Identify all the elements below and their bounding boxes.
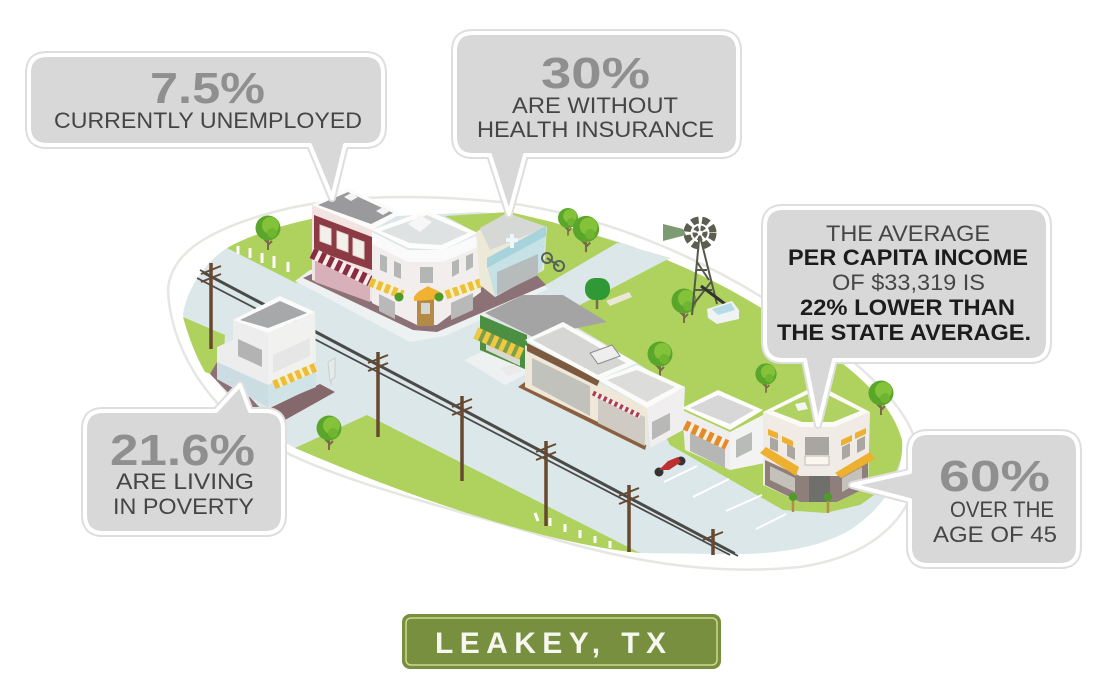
label: OVER THE bbox=[950, 497, 1054, 522]
cross bbox=[506, 234, 518, 248]
tree bbox=[755, 363, 777, 393]
tree bbox=[672, 288, 696, 323]
label: IN POVERTY bbox=[113, 494, 254, 519]
building: corner green-roof bbox=[760, 390, 875, 513]
tree bbox=[648, 342, 672, 376]
label bbox=[933, 497, 1057, 547]
red wall bbox=[312, 205, 373, 302]
callout: age bbox=[852, 433, 1078, 565]
cafe table bbox=[500, 364, 522, 376]
callout: per capita income bbox=[765, 208, 1048, 425]
bubble outline bbox=[85, 385, 283, 533]
text: OF $33,319 IS bbox=[832, 270, 985, 295]
tree bbox=[558, 208, 578, 236]
walls bbox=[763, 412, 870, 502]
bubble bbox=[765, 208, 1048, 425]
callout: unemployed bbox=[29, 55, 383, 198]
awning bbox=[685, 425, 727, 445]
door bbox=[809, 476, 830, 502]
trees bbox=[256, 208, 894, 450]
pink awning bbox=[593, 393, 640, 416]
bubble outline bbox=[765, 208, 1048, 425]
bubble outline bbox=[852, 433, 1078, 565]
grass: behind shops bbox=[445, 212, 620, 300]
red awning bbox=[312, 253, 370, 281]
bubble outline bbox=[29, 55, 383, 198]
road surface bbox=[183, 212, 902, 554]
cross arms bbox=[201, 266, 723, 540]
door pediment bbox=[414, 286, 443, 301]
awning bbox=[476, 333, 522, 354]
building: green shop bbox=[464, 295, 607, 385]
building: red and white corner block bbox=[295, 188, 548, 342]
label bbox=[113, 469, 254, 519]
side road strip bbox=[537, 243, 670, 303]
text: THE STATE AVERAGE. bbox=[777, 320, 1031, 345]
label: ARE LIVING bbox=[116, 469, 254, 494]
end wall bbox=[647, 387, 685, 448]
wires bbox=[200, 270, 738, 556]
pole bbox=[376, 352, 380, 437]
potted plants bbox=[394, 292, 444, 302]
tree bbox=[316, 416, 342, 450]
windmill bbox=[663, 220, 739, 324]
sign post bbox=[328, 358, 335, 385]
text: THE AVERAGE bbox=[826, 221, 990, 246]
value: 30% bbox=[541, 49, 650, 98]
yellow awning right bbox=[446, 282, 483, 295]
rooftop vents bbox=[590, 345, 620, 364]
value: 21.6% bbox=[110, 426, 255, 475]
tree bbox=[868, 380, 894, 415]
roof vents bbox=[344, 193, 390, 215]
bench bbox=[606, 292, 632, 306]
callout: health insurance bbox=[455, 33, 738, 214]
outer ellipse outline bbox=[168, 197, 918, 570]
bubble bbox=[29, 55, 383, 198]
roof bbox=[525, 322, 637, 380]
roof garden bbox=[773, 394, 860, 422]
red windows bbox=[320, 225, 364, 259]
tree bbox=[256, 216, 280, 250]
balcony bbox=[805, 456, 829, 465]
label: AGE OF 45 bbox=[933, 522, 1057, 547]
wheel bbox=[687, 220, 713, 246]
bicycle bbox=[542, 253, 564, 271]
lower windows bbox=[770, 466, 862, 492]
map ground island bbox=[168, 197, 918, 570]
windows bbox=[770, 436, 865, 460]
potted plants bbox=[789, 493, 832, 501]
bubble outline bbox=[455, 33, 738, 214]
value: 60% bbox=[939, 452, 1050, 501]
pole bbox=[209, 263, 213, 349]
text bbox=[777, 221, 1031, 345]
white wall bbox=[372, 232, 481, 325]
power lines bbox=[197, 263, 738, 556]
grass: lower field bbox=[295, 415, 640, 553]
pole bbox=[711, 529, 715, 555]
porch bbox=[518, 382, 647, 450]
value: 7.5% bbox=[150, 64, 265, 113]
label: CURRENTLY UNEMPLOYED bbox=[54, 108, 362, 133]
callout: poverty bbox=[85, 385, 283, 533]
white roof bbox=[372, 210, 478, 250]
building: blue clinic bbox=[476, 213, 564, 297]
front wall bbox=[525, 345, 648, 446]
bush bbox=[585, 278, 610, 309]
parking lines bbox=[664, 466, 786, 529]
label: HEALTH INSURANCE bbox=[477, 117, 714, 142]
pole bbox=[544, 441, 548, 526]
centre window bbox=[805, 437, 829, 455]
grass: top left lot bbox=[227, 218, 316, 283]
bubble bbox=[852, 433, 1078, 565]
tower bbox=[692, 240, 717, 315]
roof vent bbox=[408, 215, 432, 232]
sign plate bbox=[402, 614, 721, 669]
motorcycle bbox=[654, 456, 686, 476]
orange awnings bbox=[760, 447, 799, 476]
tail bbox=[663, 224, 686, 241]
windows bbox=[238, 339, 262, 367]
building: long storefront bbox=[518, 322, 685, 450]
pole bbox=[627, 485, 631, 552]
fences bbox=[238, 246, 610, 548]
building: lower left shop bbox=[210, 296, 335, 420]
label: ARE WITHOUT bbox=[512, 93, 678, 118]
label bbox=[477, 93, 714, 142]
water tank bbox=[707, 301, 739, 324]
striped awning bbox=[274, 367, 316, 385]
small awnings bbox=[768, 428, 866, 447]
pole bbox=[460, 396, 464, 481]
bubble bbox=[85, 385, 283, 533]
sidewalk bbox=[295, 260, 548, 342]
yellow awning left bbox=[370, 282, 403, 295]
grass: left corner bbox=[183, 317, 225, 378]
text: PER CAPITA INCOME bbox=[788, 245, 1028, 270]
right face bbox=[268, 312, 316, 385]
tree bbox=[573, 216, 599, 252]
title: LEAKEY, TX bbox=[435, 627, 666, 660]
inner line bbox=[406, 618, 717, 665]
shop forecourt bbox=[270, 384, 335, 420]
roof bbox=[233, 296, 315, 333]
white windows bbox=[380, 253, 473, 283]
roof rim bbox=[763, 390, 870, 427]
grass: main field bbox=[578, 243, 902, 513]
location sign bbox=[402, 614, 721, 669]
red roof bbox=[312, 188, 402, 230]
text: 22% LOWER THAN bbox=[800, 295, 1015, 320]
left face bbox=[217, 320, 268, 407]
building: small white shop bbox=[682, 390, 765, 470]
bubble bbox=[455, 33, 738, 214]
lower storey bbox=[765, 460, 868, 502]
door bbox=[417, 298, 434, 326]
